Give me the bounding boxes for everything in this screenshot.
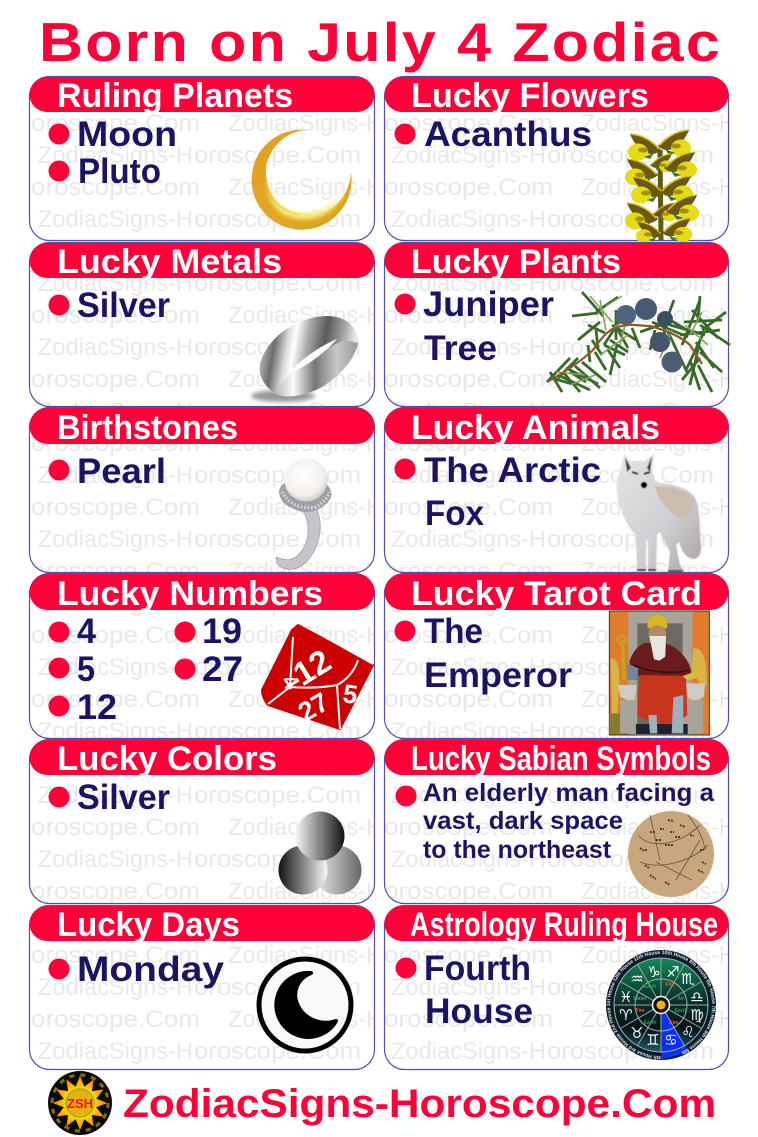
icon: juniper branch: [547, 292, 730, 392]
list: plant: Tree: [424, 329, 497, 368]
icon: white arctic wolf: [617, 454, 701, 571]
list: numbers: 4: [77, 612, 97, 651]
icon: zodiac house wheel: ♐︎: [666, 963, 680, 981]
panel: lucky days: [30, 906, 374, 1070]
list: sabian symbol: to the northeast: [423, 836, 612, 864]
footer logo: zodiac sun: ZSH: [67, 1096, 93, 1111]
list: sabian symbol: vast, dark space: [423, 807, 623, 835]
heading: lucky days: Lucky Days: [57, 906, 240, 944]
list: planets: [48, 115, 177, 191]
icon: red polyhedral die: 5: [341, 678, 360, 710]
icon: zodiac house wheel: ♉︎: [630, 1024, 644, 1042]
icon: zodiac house wheel: 4th House 3rd House 2nd House 1st House 12th House 11th House 10th House 9th House 8th House 7th House 6th House 5th: [606, 950, 716, 1060]
list: house: Fourth: [424, 949, 531, 988]
list: numbers: 27: [202, 650, 243, 689]
icon: emperor tarot card: [609, 611, 709, 735]
list: planets: Pluto: [78, 152, 161, 191]
list: flower: Acanthus: [424, 115, 592, 154]
icon: acanthus flower spike: [625, 130, 699, 243]
icon: zodiac house wheel: Fire: [635, 1008, 645, 1014]
panel: lucky colors: [30, 740, 374, 904]
list: day: Monday: [77, 950, 225, 989]
heading: lucky flowers: Lucky Flowers: [411, 77, 649, 115]
list: animal: Fox: [425, 494, 484, 533]
list: color: Silver: [77, 778, 170, 817]
heading: ruling planets: Ruling Planets: [57, 77, 293, 115]
icon: zodiac house wheel: Earth: [675, 1008, 687, 1014]
footer website name: ZodiacSigns-Horoscope.Com: [123, 1082, 716, 1126]
list: numbers: 5: [77, 650, 95, 689]
icon: zodiac house wheel: ♒︎: [630, 970, 644, 988]
title: Born on July 4 Zodiac: [39, 11, 722, 73]
icon: zodiac house wheel: Earth: [644, 1020, 656, 1026]
icon: zodiac house wheel: ♊︎: [646, 1031, 660, 1049]
icon: silver ring: [251, 316, 358, 402]
icon: golden crescent moon: [252, 130, 352, 230]
panel: lucky numbers: [30, 574, 374, 738]
heading: lucky plants: Lucky Plants: [411, 243, 621, 281]
icon: zodiac house wheel: ♌︎: [681, 1023, 695, 1041]
icon: three silver gradient circles: [278, 812, 362, 894]
icon: zodiac house wheel: ♑︎: [647, 963, 661, 981]
list: house: [396, 949, 533, 1031]
icon: zodiac house wheel: ♎︎: [690, 988, 704, 1006]
panel: lucky flowers: [384, 76, 728, 243]
icon: red polyhedral die: 27: [293, 687, 334, 728]
icon: zodiac house wheel: ♋︎: [664, 1031, 678, 1049]
icon: zodiac house wheel: ♍︎: [690, 1006, 704, 1024]
list: tarot: [394, 612, 572, 695]
icon: zodiac house wheel: ♓︎: [619, 988, 633, 1006]
icon: red polyhedral die: 12: [287, 642, 337, 693]
list: birthstone: Pearl: [77, 452, 166, 491]
list: tarot: The: [424, 612, 483, 651]
icon: zodiac house wheel: Water: [633, 996, 647, 1002]
icon: pearl ring: [276, 458, 331, 569]
list: numbers: 12: [77, 688, 117, 727]
panel: lucky metals: [30, 242, 374, 406]
heading: lucky colors: Lucky Colors: [57, 740, 277, 778]
panel: lucky animals: [384, 408, 728, 572]
heading: lucky tarot card: Lucky Tarot Card: [411, 575, 702, 613]
panel: astrology ruling house: [384, 904, 730, 1070]
list: numbers: [48, 612, 243, 727]
list: tarot: Emperor: [424, 656, 572, 695]
panel: lucky plants: [384, 242, 730, 406]
list: sabian symbol: [396, 779, 715, 864]
heading: lucky animals: Lucky Animals: [411, 409, 660, 447]
heading: birthstones: Birthstones: [57, 409, 238, 447]
icon: zodiac house wheel: ♏︎: [681, 970, 695, 988]
list: animal: The Arctic: [424, 451, 601, 490]
icon: zodiac house wheel: Earth: [644, 984, 656, 990]
icon: sabian chart disc: [628, 811, 714, 897]
icon: red polyhedral die: 4: [276, 669, 305, 694]
icon: zodiac house wheel: Fire: [665, 982, 675, 988]
list: metal: Silver: [77, 286, 170, 325]
panel: birthstones: [30, 408, 374, 572]
icon: zodiac house wheel: ♈︎: [619, 1006, 633, 1024]
panel: lucky sabian symbols: [384, 740, 728, 904]
list: planets: Moon: [77, 115, 177, 154]
footer logo: zodiac sun: [48, 1071, 112, 1135]
list: numbers: 19: [202, 612, 242, 651]
heading: lucky metals: Lucky Metals: [57, 243, 282, 281]
list: plant: [394, 285, 554, 368]
list: animal: [394, 451, 601, 533]
heading: lucky numbers: Lucky Numbers: [57, 575, 323, 613]
icon: black crescent in circle: [259, 959, 351, 1051]
panel: lucky tarot card: [384, 574, 728, 738]
list: sabian symbol: An elderly man facing a: [423, 779, 715, 807]
list: plant: Juniper: [423, 285, 554, 324]
icon: red polyhedral die: [262, 625, 373, 729]
icon: zodiac house wheel: Fire: [669, 1020, 679, 1026]
panel: ruling planets: [30, 76, 374, 240]
icon: zodiac house wheel: Air: [678, 996, 685, 1002]
list: house: House: [425, 992, 533, 1031]
